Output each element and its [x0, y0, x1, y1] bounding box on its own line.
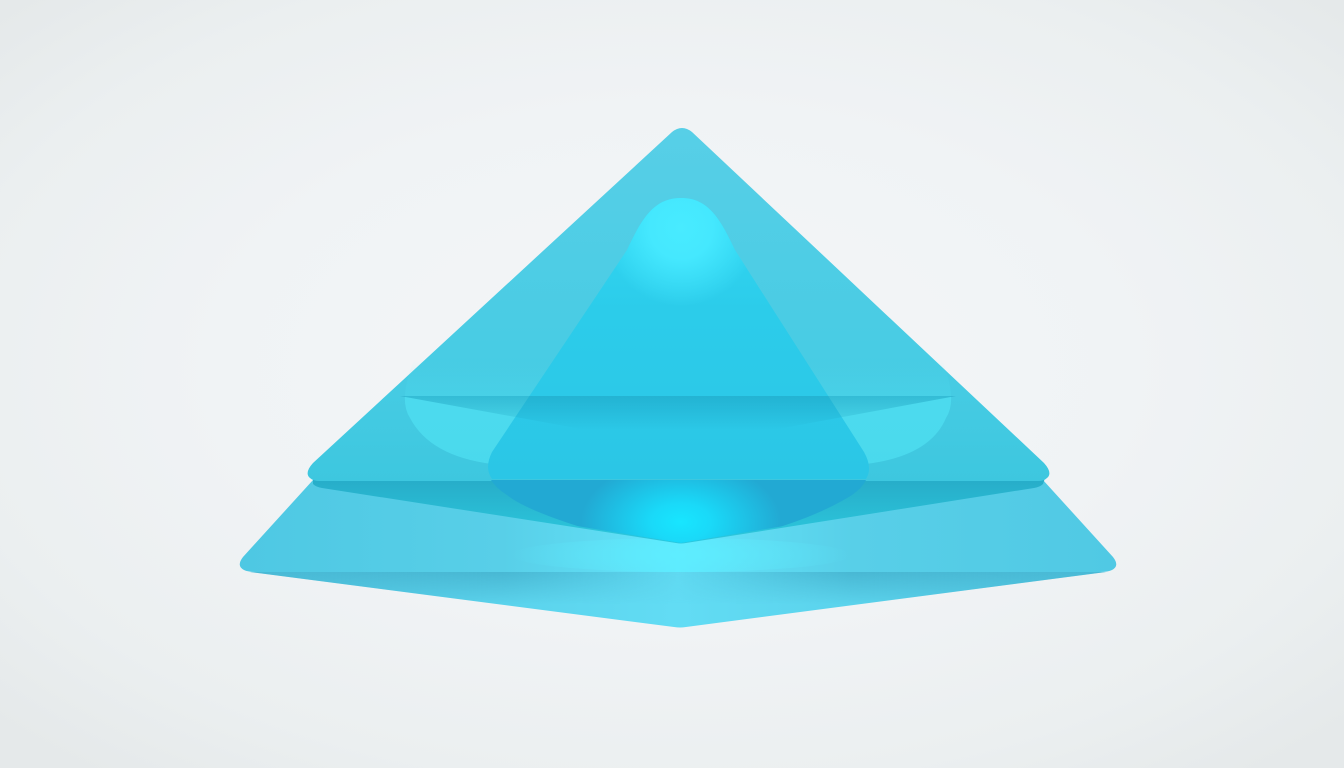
main triangle	[308, 128, 1049, 481]
cone base shade	[491, 480, 866, 550]
bottom band centre glow	[511, 538, 851, 572]
middle layer	[308, 128, 1049, 544]
layered pyramid graphic	[218, 108, 1128, 628]
bottom layer tip shadow	[250, 572, 1106, 596]
shelf shadow	[400, 396, 956, 447]
bottom layer tip	[250, 572, 1106, 628]
cone top glow	[626, 198, 736, 291]
inner cone	[488, 198, 869, 550]
bottom layer	[240, 480, 1116, 628]
cone body	[488, 198, 869, 479]
cone base glow	[592, 480, 769, 543]
middle fold under the main triangle	[313, 478, 1045, 544]
bottom layer band	[240, 480, 1116, 572]
inner lobes	[405, 360, 951, 464]
